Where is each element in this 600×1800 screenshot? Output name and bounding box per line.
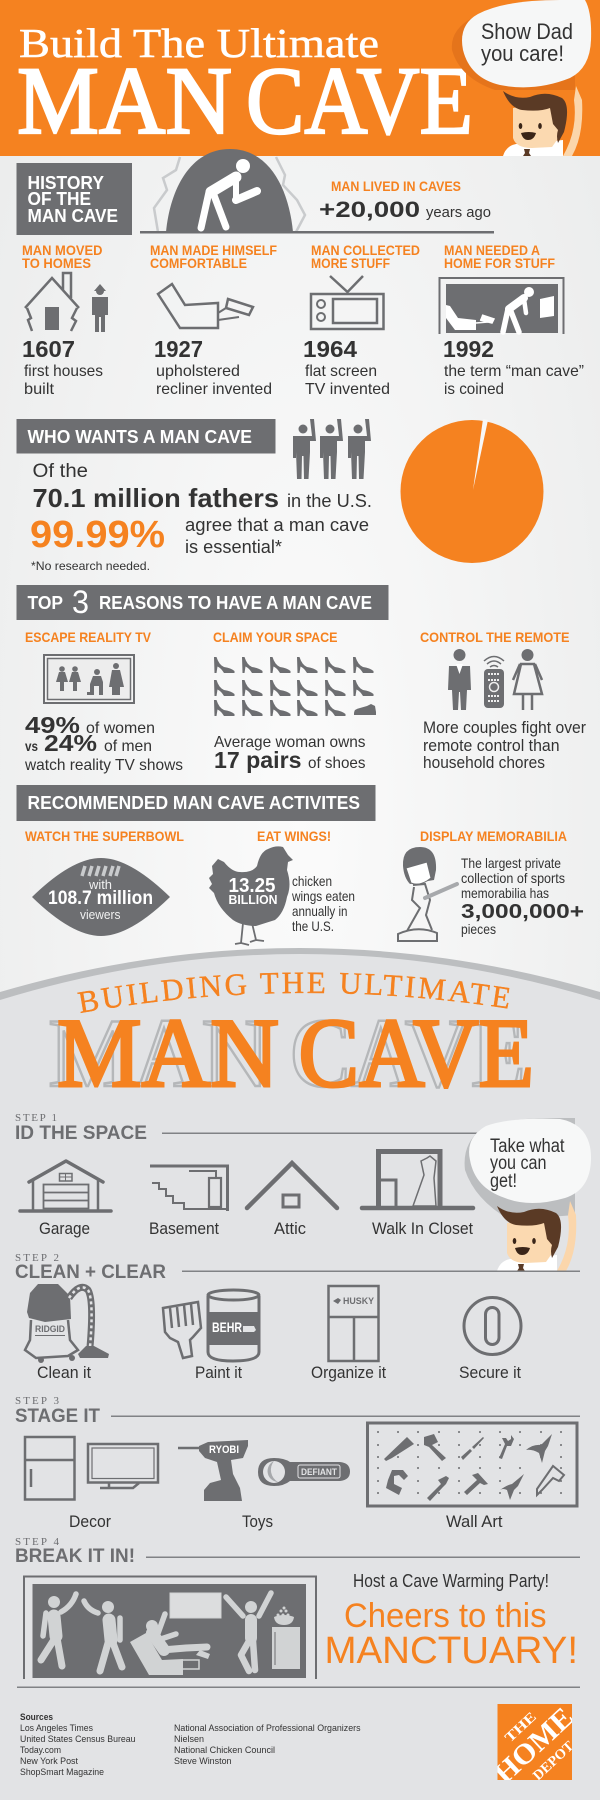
title orange text [57,999,534,1108]
reason: escape reality tv [24,629,183,774]
callout: man lived in caves [319,178,491,222]
step 1 heading: ID THE SPACE [15,1123,147,1144]
heading: top 3 reasons: REASONS TO HAVE A MAN CAVE [99,593,372,613]
reason: escape reality tv: 24% [44,730,97,756]
labels: Wall Art [446,1512,503,1531]
labels: Attic [274,1219,306,1238]
activity: eat wings: 13.25 [228,875,276,897]
cartoon dad (second) [497,1201,576,1271]
heading: who wants [16,419,276,454]
activity: eat wings [209,828,355,945]
statistic text [30,461,372,573]
header title: MAN CAVE [17,47,473,154]
timeline: 1964: flat screen [305,363,377,380]
icon: fridge [24,1437,75,1500]
closing message [324,1571,578,1672]
heading: top 3 reasons [16,584,388,620]
statistic text: 70.1 million fathers [32,483,279,513]
icon: pegboard with tools [368,1423,577,1506]
reason: control the remote [420,629,586,772]
reason: claim your space: Average woman owns [214,734,366,751]
pie chart: 99.99 percent [400,419,544,563]
heading: history: OF THE [28,189,91,209]
timeline: 1992: HOME FOR STUFF [444,256,555,271]
header title: Build The Ultimate: Build The Ultimate [19,20,379,66]
icon: husky cabinet: HUSKY [343,1296,374,1306]
icon: ryobi drill [178,1440,248,1501]
statistic text: in the U.S. [287,491,372,511]
timeline: 1607: built [24,381,55,398]
sources list: Today.com [20,1745,61,1756]
sources list: ShopSmart Magazine [20,1767,104,1778]
step 3 heading: STAGE IT [15,1406,100,1427]
icon: garage [20,1161,111,1211]
step 4 heading [15,1536,580,1567]
icon: bobblehead batter [398,847,457,941]
heading: top 3 reasons: TOP [28,593,63,613]
sources list: Steve Winston [174,1756,232,1767]
icon: football [32,858,170,936]
title orange text: CAVE [298,999,534,1108]
icon: attic [247,1163,337,1208]
footer divider and sources [17,1686,580,1790]
icon: television [311,276,384,329]
statistic text: Of the [32,461,88,482]
timeline: 1927 [150,243,277,398]
icon: husky cabinet [328,1286,379,1361]
lower section arc background [0,948,600,1800]
heading: history [16,163,132,235]
timeline: 1607: 1607 [22,336,75,362]
reason: escape reality tv: of women [86,720,155,737]
activity: display memorabilia: DISPLAY MEMORABILIA [420,828,567,844]
labels [37,1363,521,1382]
activity: superbowl: 108.7 million [48,888,153,909]
timeline: 1927: MAN MADE HIMSELF [150,243,277,258]
icon: cave with caveman [140,149,494,234]
speech bubble: take what you can get: Take what [490,1136,565,1157]
timeline: 1964: 1964 [303,336,357,362]
reason: claim your space: of shoes [308,755,366,772]
icon: shop vacuum [25,1284,109,1363]
step 3: stage it [15,1395,580,1531]
labels: Decor [69,1512,111,1531]
icon: defiant lock: DEFIANT [301,1467,337,1477]
title orange text: MAN [57,999,279,1108]
step 4: break it in [15,1536,580,1679]
timeline: 1927: recliner invented [156,381,272,398]
labels [39,1219,473,1238]
activity: display memorabilia: The largest private [461,855,561,871]
icon: basement [150,1166,228,1211]
closing message: Cheers to this [344,1597,546,1635]
sources list: Nielsen [174,1734,204,1745]
closing message: MANCTUARY! [324,1630,578,1672]
sources list [20,1712,361,1778]
icon: paint brush and can: BEHR [212,1319,242,1335]
activity: eat wings: wings eaten [291,888,355,904]
title shadow: MAN [48,999,270,1108]
activity: superbowl: with [88,877,112,892]
reason: escape reality tv: ESCAPE REALITY TV [25,629,152,645]
activity: display memorabilia: memorabilia has [461,885,549,901]
activity: display memorabilia: 3,000,000+ [461,901,584,923]
step 3 heading: STEP 3 [15,1395,60,1407]
activity: display memorabilia: pieces [461,921,496,937]
panel: history of the man cave [16,149,584,398]
callout: man lived in caves: MAN LIVED IN CAVES [331,178,461,194]
speech bubble: Show Dad you care: Show Dad [481,19,573,44]
labels: Basement [149,1219,219,1238]
labels: Garage [39,1219,90,1238]
step 3 heading [15,1395,580,1427]
labels [69,1512,503,1531]
icon: man cave room [440,278,564,334]
sources list: Los Angeles Times [20,1723,93,1734]
icon: rows of shoes [214,657,376,716]
icon: tv with reality show [43,654,135,704]
title shadow: CAVE [290,999,526,1108]
timeline: 1607 [22,243,108,398]
cartoon dad [503,86,582,156]
icon: house and settler [25,273,108,332]
icon: defiant lock [258,1458,350,1486]
sources list: New York Post [20,1756,78,1767]
activity: eat wings: annually in [292,903,348,919]
logo: the home depot: HOME [488,1701,580,1790]
sources list: United States Census Bureau [20,1734,136,1745]
labels: Paint it [195,1363,242,1382]
icon: three men raising hands [293,419,371,479]
labels: Secure it [459,1363,521,1382]
callout: man lived in caves: years ago [426,204,491,221]
timeline: 1964: TV invented [305,381,390,398]
statistic text: agree that a man cave [185,515,369,535]
speech bubble: take what you can get [465,1118,591,1220]
header banner [0,0,600,156]
closing message: Host a Cave Warming Party! [353,1571,549,1591]
speech bubble: take what you can get: get! [490,1171,517,1192]
activity: display memorabilia: collection of sports [461,870,565,886]
step 1: id the space [15,1112,478,1238]
reason: escape reality tv: watch reality TV shows [24,757,183,774]
heading: who wants: WHO WANTS A MAN CAVE [28,427,252,447]
icon: party scene [24,1576,316,1679]
icon: walk in closet [362,1152,473,1208]
step 1 heading [15,1112,478,1144]
speech bubble: Show Dad you care [452,0,591,90]
statistic text: 99.99% [30,514,165,556]
heading: history: MAN CAVE [28,206,118,226]
icon: paint brush and can [163,1290,259,1361]
icon: recliner [158,284,253,328]
activity: superbowl [25,828,184,936]
step 2: clean and clear [15,1252,580,1382]
icon: flat screen tv [88,1444,158,1488]
reason: control the remote: remote control than [423,736,560,755]
sources list: National Association of Professional Organizers [174,1723,361,1734]
icon: ryobi drill: RYOBI [209,1444,239,1456]
timeline: 1992: 1992 [443,336,494,362]
activity: eat wings: EAT WINGS! [257,828,331,844]
reason: control the remote: More couples fight over [423,718,586,737]
reason: escape reality tv: vs [25,738,38,754]
timeline: 1964 [303,243,420,398]
timeline: 1607: MAN MOVED [22,243,103,258]
speech bubble: Show Dad you care: you care! [481,41,564,66]
activity: eat wings: BILLION [228,892,278,907]
header title: MAN CAVE: MAN [17,47,232,154]
activity: eat wings: chicken [292,873,332,889]
activity: eat wings: the U.S. [292,918,334,934]
panel: top 3 reasons [16,584,586,774]
timeline: 1992: the term “man cave” [444,363,584,380]
timeline: 1927: COMFORTABLE [150,256,247,271]
step 1 heading: STEP 1 [15,1112,57,1124]
step 2 heading: STEP 2 [15,1252,59,1264]
speech bubble: take what you can get: you can [490,1153,546,1174]
heading: top 3 reasons: 3 [72,584,89,620]
logo: the home depot: THE [502,1710,540,1746]
step 4 heading: STEP 4 [15,1536,60,1548]
step 2 heading [15,1252,580,1283]
panel: who wants a man cave [16,419,544,573]
labels: Organize it [311,1363,386,1382]
activity: display memorabilia [398,828,584,941]
timeline: 1607: TO HOMES [22,256,91,271]
panel: recommended activities [16,785,584,945]
sources list: National Chicken Council [174,1745,275,1756]
labels: Clean it [37,1363,91,1382]
icon: chicken [209,846,293,945]
reason: claim your space: 17 pairs [214,747,302,773]
title: building the ultimate man cave [48,972,534,1108]
icon: couple and remote [448,649,542,710]
timeline: 1992 [440,243,584,398]
timeline: 1927: upholstered [156,363,240,380]
timeline: 1964: MORE STUFF [311,256,390,271]
reason: claim your space [213,629,376,773]
icon: lock [464,1298,521,1354]
timeline: 1607: first houses [24,363,103,380]
reason: control the remote: household chores [423,753,545,772]
step 4 heading: BREAK IT IN! [15,1546,135,1567]
heading: recommended activities [16,785,376,821]
header title: MAN CAVE: CAVE [246,47,473,154]
title shadow [48,999,526,1108]
sources list: Sources [20,1712,53,1723]
timeline: 1992: is coined [444,381,504,398]
reason: escape reality tv: 49% [25,712,80,738]
statistic text: *No research needed. [31,559,150,573]
timeline: 1927: 1927 [154,336,203,362]
heading: history: HISTORY [28,173,104,193]
timeline: 1992: MAN NEEDED A [444,243,540,258]
activity: superbowl: viewers [80,907,121,922]
step 2 heading: CLEAN + CLEAR [15,1262,166,1283]
icon: shop vacuum: RIDGID [35,1324,65,1335]
reason: claim your space: CLAIM YOUR SPACE [213,629,338,645]
callout: man lived in caves: +20,000 [319,197,420,222]
labels: Walk In Closet [372,1219,473,1238]
curved title: BUILDING THE ULTIMATE [77,972,510,1014]
activity: superbowl: WATCH THE SUPERBOWL [25,828,184,844]
timeline: 1964: MAN COLLECTED [311,243,420,258]
heading: recommended activities: RECOMMENDED MAN CAVE ACTIVITES [28,793,360,813]
reason: escape reality tv: of men [104,738,152,755]
statistic text: is essential* [185,537,282,557]
logo: the home depot: DEPOT [530,1738,578,1784]
reason: control the remote: CONTROL THE REMOTE [420,629,570,645]
labels: Toys [242,1512,273,1531]
party figures [41,1593,271,1671]
